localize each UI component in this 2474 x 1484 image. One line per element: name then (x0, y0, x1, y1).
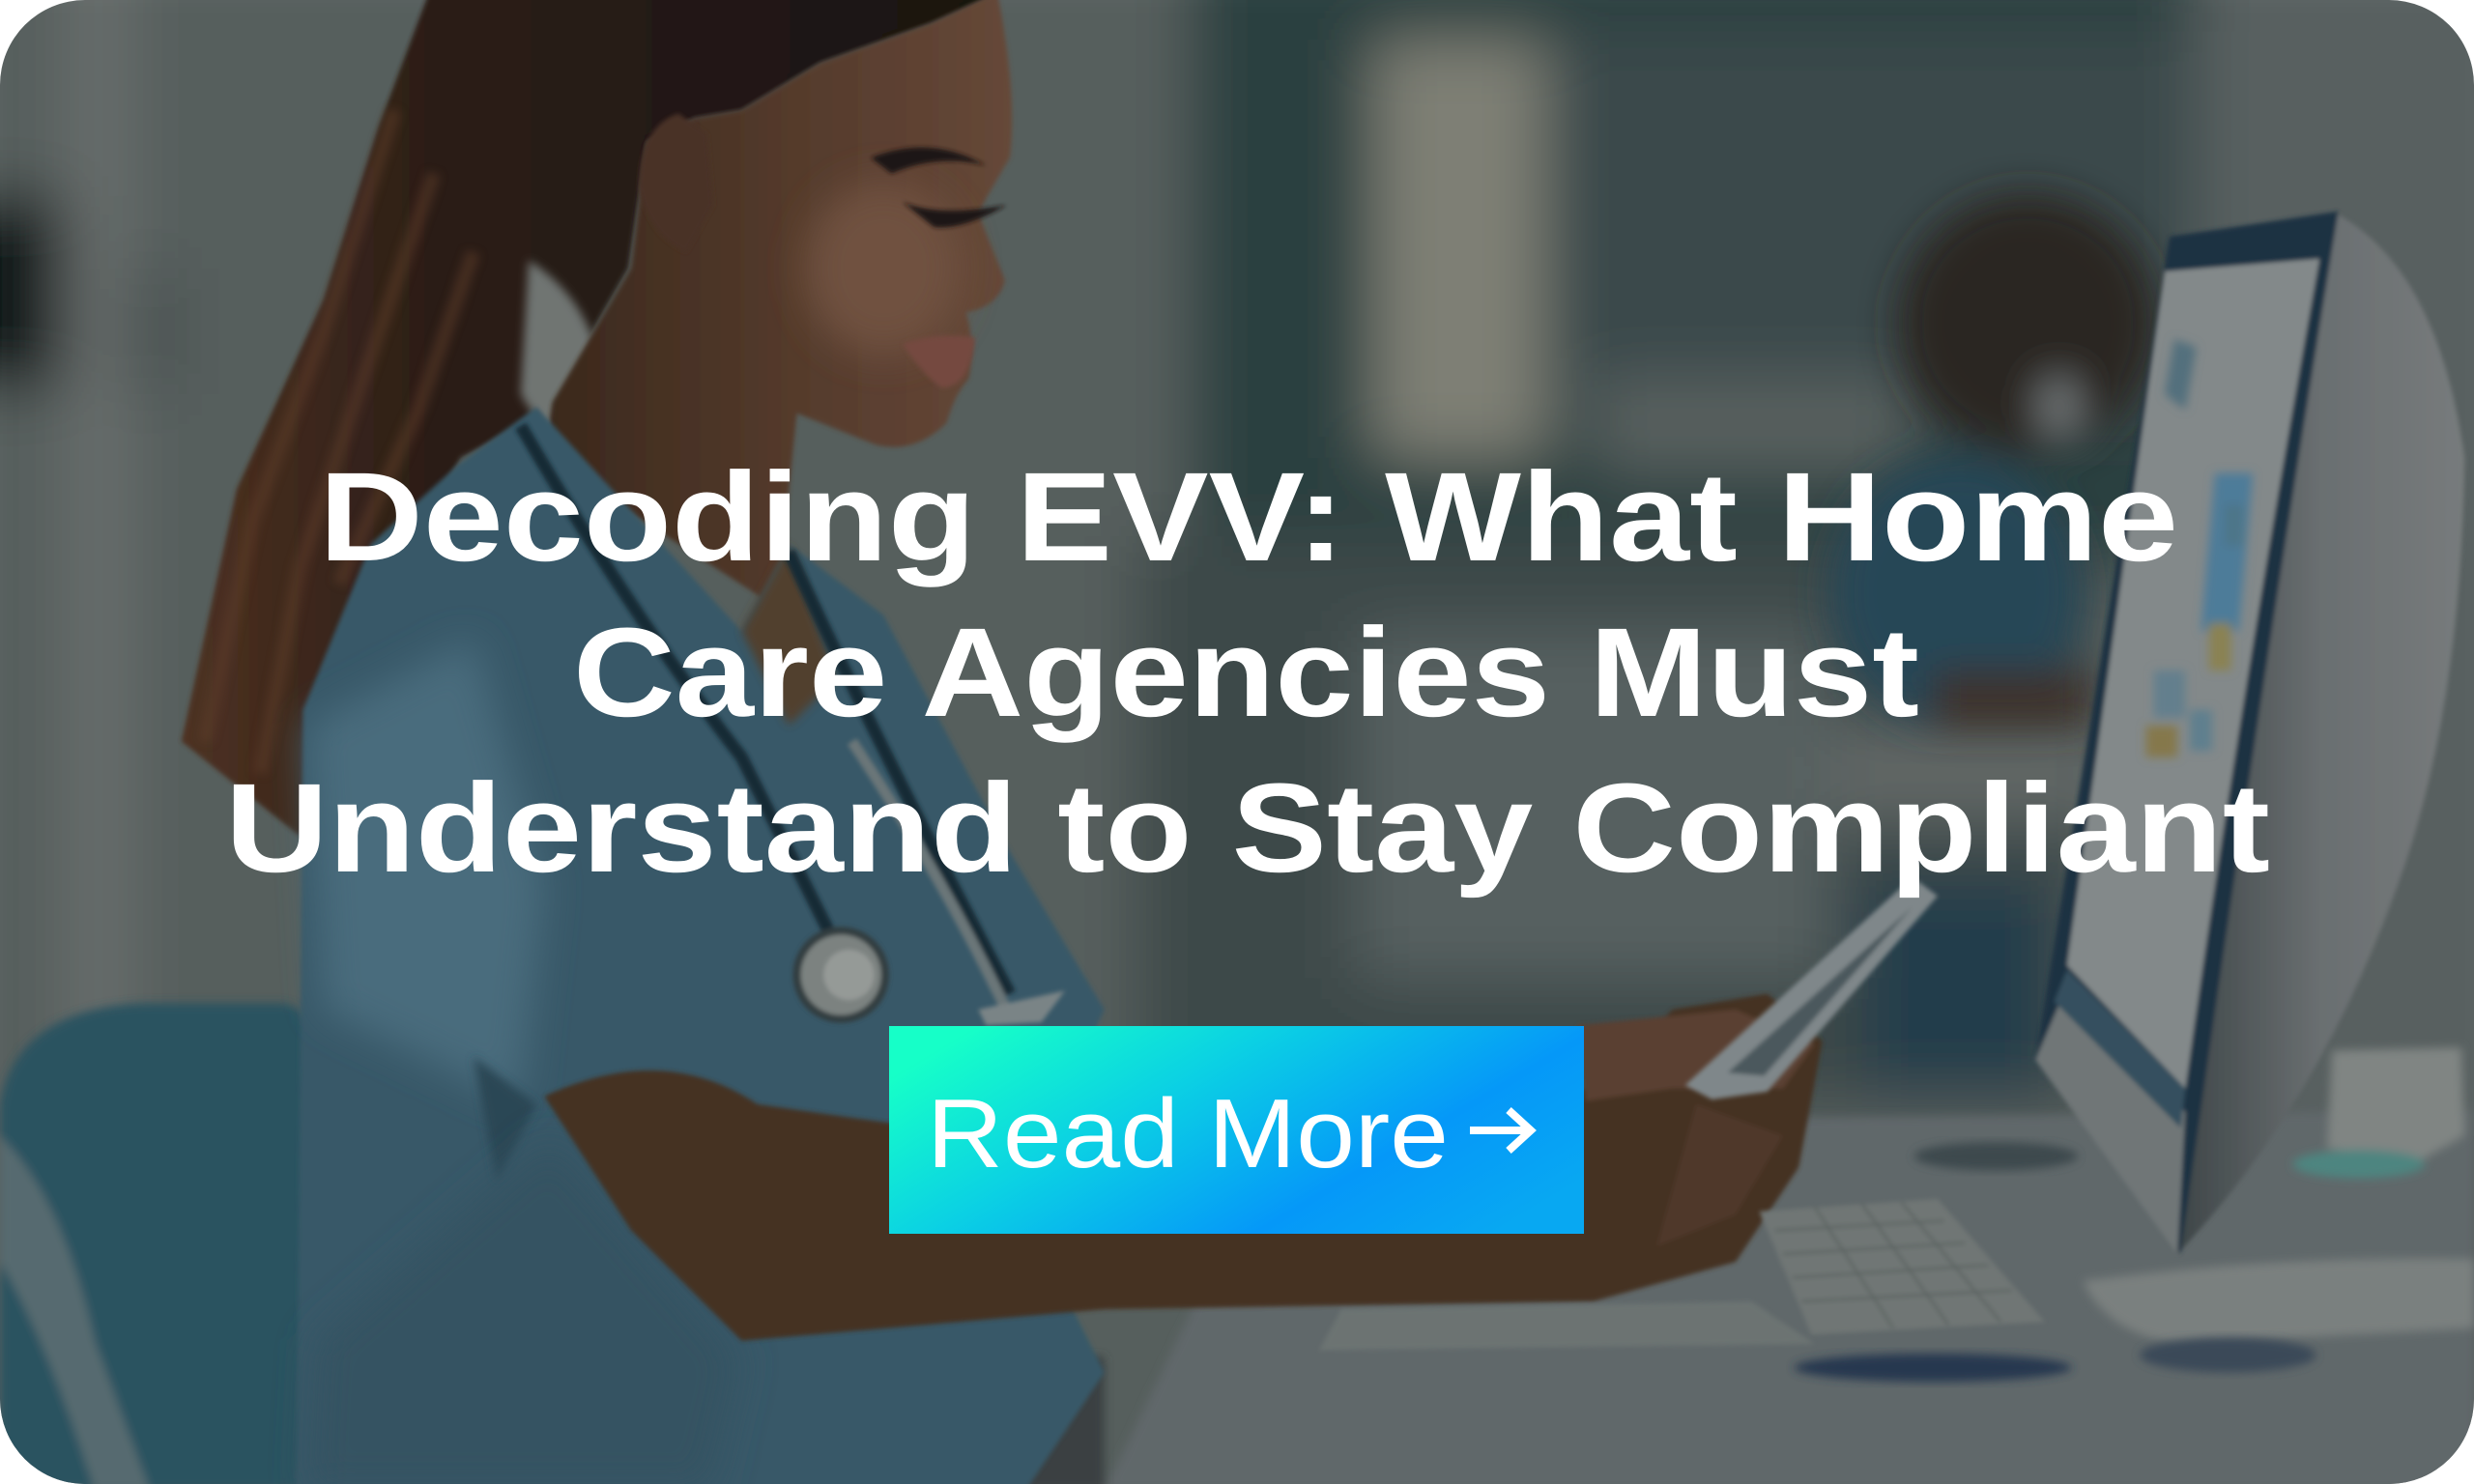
desk (1105, 1110, 2474, 1484)
monitor (2035, 212, 2464, 1254)
neck gap highlight (515, 257, 593, 420)
monitor stand base (2083, 1259, 2474, 1344)
title: Care Agencies Must (573, 601, 1919, 743)
chair (0, 999, 302, 1484)
blurred colleague in background (1830, 194, 2157, 726)
arrow icon (1470, 1110, 1531, 1151)
coffee cup (2292, 1047, 2464, 1179)
dashboard on monitor screen (2145, 339, 2253, 757)
cheek highlight (805, 182, 963, 355)
paper sheet (1319, 1301, 1815, 1351)
title: Decoding EVV: What Home (319, 445, 2178, 587)
read more button (889, 1026, 1584, 1234)
eye and brow (871, 148, 1007, 227)
arm and hands (544, 994, 1823, 1341)
smartphone (1685, 877, 1938, 1099)
ponytail (182, 0, 1002, 836)
small mouse near monitor (1913, 1142, 2078, 1170)
stand foot (2140, 1338, 2316, 1372)
stethoscope (521, 426, 1065, 1025)
chair under the arm (1028, 1355, 1108, 1484)
mousepad shadow (1794, 1354, 2072, 1382)
scrubs top (297, 407, 1105, 1484)
ear (638, 112, 689, 195)
title: Understand to Stay Compliant (225, 756, 2270, 899)
lips (903, 335, 975, 388)
button label: Read More (927, 1080, 1449, 1188)
face and neck (544, 0, 1012, 615)
keyboard (1759, 1199, 2045, 1334)
title (225, 445, 2270, 899)
